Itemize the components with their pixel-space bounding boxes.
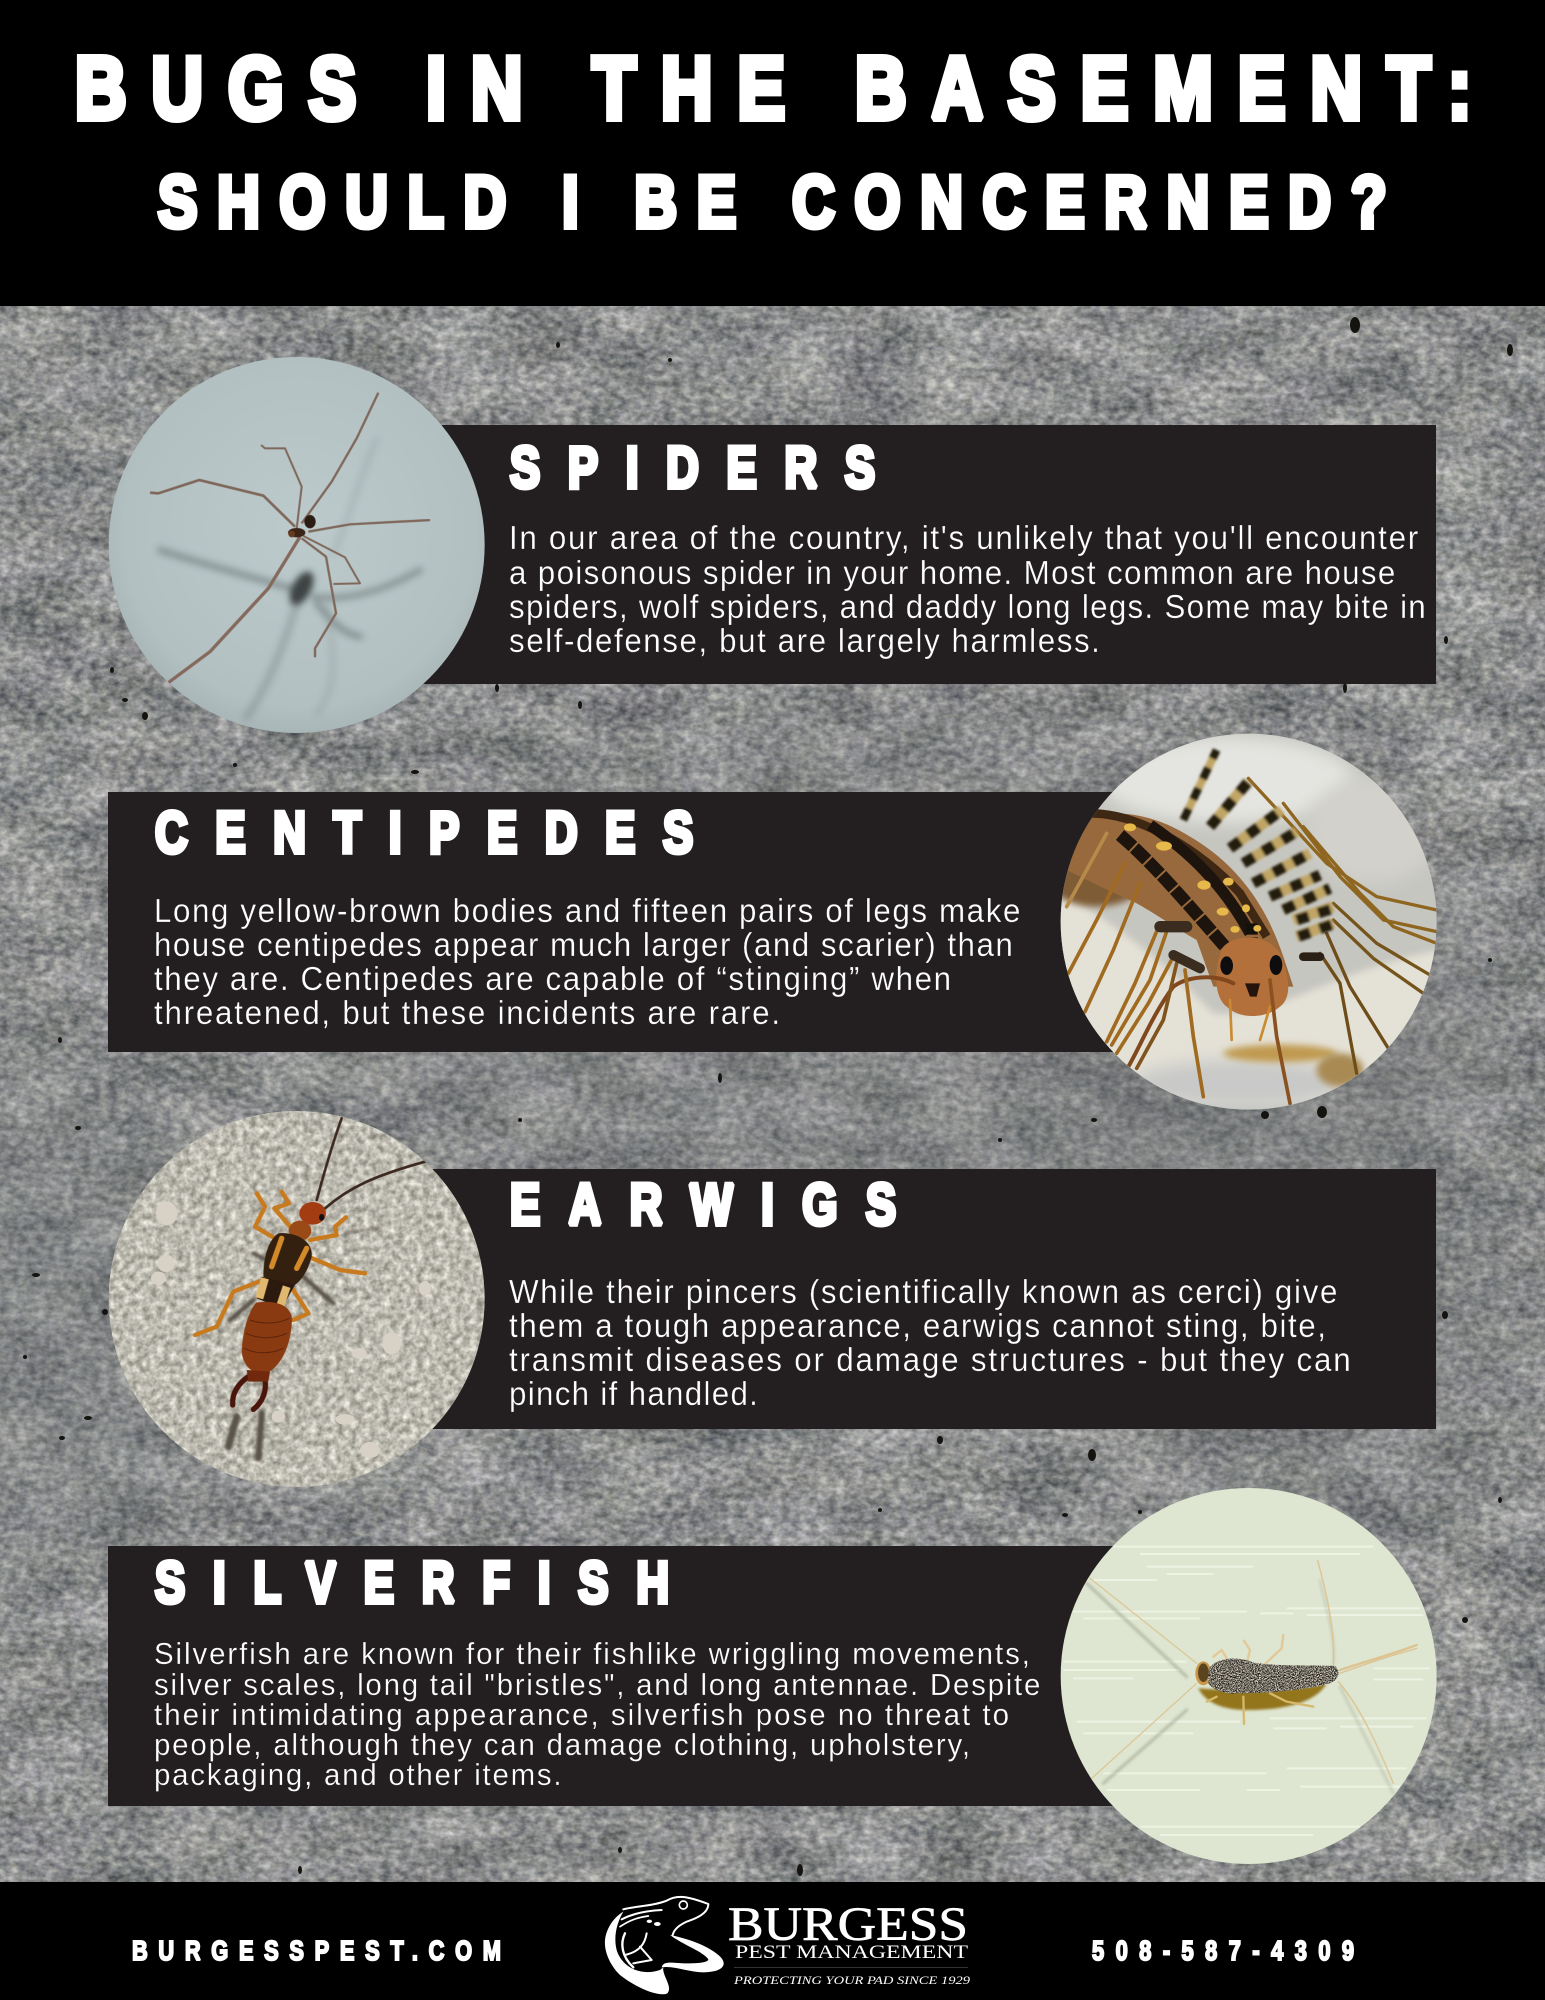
icon: frog	[605, 1897, 724, 1994]
logo	[605, 1897, 970, 1994]
heading: spiders: SPIDERS	[510, 436, 875, 501]
text: spiders: a poisonous spider in your home. Most common are house	[509, 554, 1395, 591]
heading: centipedes: CENTIPEDES	[155, 801, 693, 866]
text: spiders: self-defense, but are largely harmless.	[509, 622, 1100, 659]
text: spiders: spiders, wolf spiders, and daddy long legs. Some may bite in	[509, 588, 1426, 625]
text: silverfish: packaging, and other items.	[154, 1758, 562, 1792]
panel: centipedes	[108, 792, 1148, 1052]
text: silverfish: Silverfish are known for their fishlike wriggling movements,	[154, 1637, 1030, 1671]
title: SHOULD I BE CONCERNED?	[158, 162, 1387, 243]
text: earwigs: them a tough appearance, earwigs cannot sting, bite,	[509, 1307, 1326, 1344]
phone number: 508-587-4309	[1092, 1935, 1354, 1967]
text: silverfish: people, although they can damage clothing, upholstery,	[154, 1728, 970, 1762]
website: BURGESSPEST.COM	[132, 1935, 501, 1967]
text: earwigs: While their pincers (scientifically known as cerci) give	[509, 1273, 1337, 1310]
title: BUGS IN THE BASEMENT:	[75, 39, 1471, 137]
photo: silverfish	[1060, 1488, 1437, 1864]
photo: centipede	[1060, 734, 1437, 1110]
heading: silverfish: SILVERFISH	[155, 1551, 669, 1616]
concrete background	[0, 300, 1545, 1890]
photo: spider	[108, 357, 485, 733]
text: earwigs: transmit diseases or damage structures - but they can	[509, 1341, 1351, 1378]
text: spiders: In our area of the country, it's unlikely that you'll encounter	[509, 519, 1418, 556]
title	[75, 39, 1471, 243]
logo wordmark: BURGESS	[728, 1898, 968, 1951]
heading: earwigs: EARWIGS	[510, 1173, 896, 1238]
panel: spiders	[400, 425, 1436, 684]
text: earwigs	[509, 1273, 1351, 1412]
text: centipedes: house centipedes appear much larger (and scarier) than	[154, 926, 1013, 963]
logo tagline: PROTECTING YOUR PAD SINCE 1929	[733, 1975, 970, 1987]
text: centipedes: they are. Centipedes are capable of “stinging” when	[154, 960, 951, 997]
text: silverfish	[154, 1637, 1040, 1792]
logo: PEST MANAGEMENT	[735, 1942, 968, 1963]
text: centipedes: Long yellow-brown bodies and fifteen pairs of legs make	[154, 892, 1020, 929]
panel: silverfish	[108, 1546, 1148, 1806]
footer band	[0, 1882, 1545, 2000]
text: earwigs: pinch if handled.	[509, 1375, 758, 1412]
text: spiders	[509, 519, 1426, 659]
photo: earwig	[108, 1111, 485, 1487]
header band	[0, 0, 1545, 306]
text: silverfish: silver scales, long tail "bristles", and long antennae. Despite	[154, 1668, 1040, 1702]
text: centipedes: threatened, but these incidents are rare.	[154, 994, 780, 1031]
text: silverfish: their intimidating appearance, silverfish pose no threat to	[154, 1698, 1009, 1732]
panel: earwigs	[400, 1169, 1436, 1429]
text: centipedes	[154, 892, 1020, 1031]
